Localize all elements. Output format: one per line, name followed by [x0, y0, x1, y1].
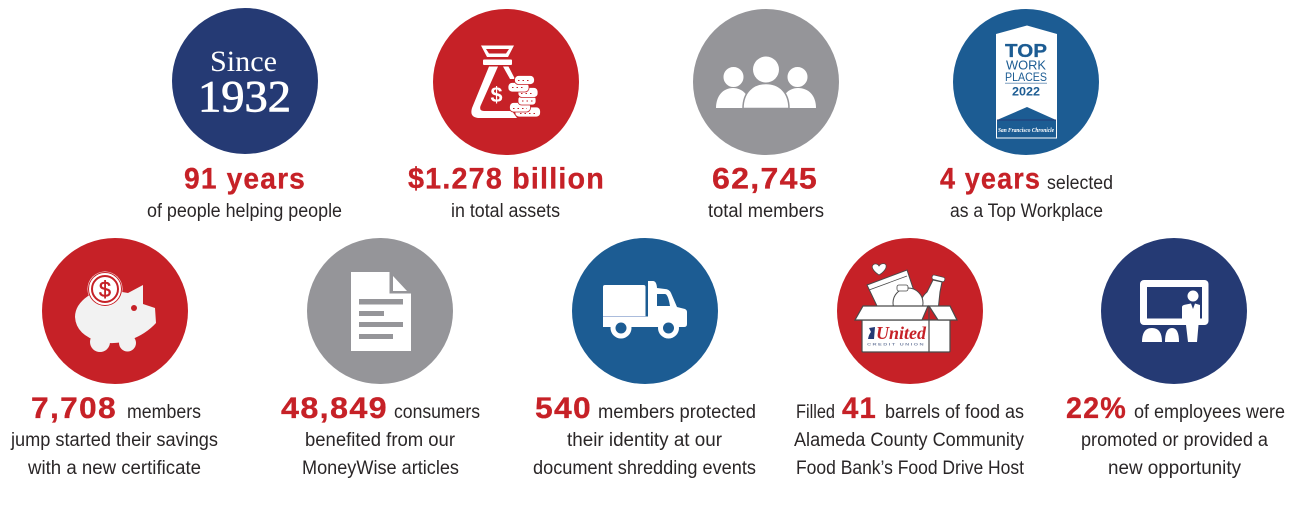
text: 540 members protected: their identity at our: [567, 430, 723, 451]
text: 4 years selected: selected: [1047, 173, 1113, 194]
stat: top workplace: [940, 9, 1113, 222]
circle icon: money bag and coins: [433, 9, 579, 155]
text: 7,708 members: with a new certificate: [27, 458, 201, 479]
circle icon: top workplaces badge: WORK: [1006, 58, 1046, 72]
text: $1.278 billion: in total assets: [451, 201, 560, 222]
text: filled 41 barrels: Alameda County Community: [794, 430, 1024, 451]
text: 540 members protected: document shredding events: [533, 458, 756, 479]
text: 48,849 consumers: 48,849: [281, 392, 388, 425]
circle icon: top workplaces badge: [953, 9, 1099, 155]
text: $1.278 billion: [408, 162, 605, 222]
text: filled 41 barrels: 41: [842, 392, 877, 425]
text: 4 years selected: [940, 162, 1113, 222]
text: 48,849 consumers: MoneyWise articles: [302, 458, 459, 479]
text: 4 years selected: as a Top Workplace: [950, 201, 1103, 222]
circle icon: presenter at board: [1101, 238, 1247, 384]
circle icon: since 1932: 1932: [198, 72, 291, 121]
text: 91 years: [147, 162, 342, 222]
stat: document shredding: [533, 238, 756, 479]
text: 540 members protected: 540: [535, 392, 592, 425]
text: $1.278 billion: $1.278 billion: [408, 162, 605, 196]
text: 22% of employees: promoted or provided a: [1081, 430, 1268, 451]
stat: total members: [693, 9, 839, 222]
text: 7,708 members: 7,708: [31, 392, 117, 425]
stat: food drive: [794, 238, 1025, 479]
circle icon: top workplaces badge: PLACES: [1005, 70, 1047, 84]
text: 22% of employees: 22%: [1066, 392, 1127, 425]
circle icon: three people: [693, 9, 839, 155]
text: 7,708 members: [10, 392, 218, 479]
text: 62,745: total members: [708, 201, 824, 222]
circle icon: piggy bank: $: [99, 277, 111, 302]
text: 22% of employees: of employees were: [1134, 402, 1285, 423]
circle icon: food donation box: CREDIT UNION: [867, 342, 925, 346]
text: 7,708 members: members: [127, 402, 201, 423]
text: 91 years: of people helping people: [147, 201, 342, 222]
circle icon: truck: [572, 238, 718, 384]
text: 48,849 consumers: [281, 392, 480, 479]
stat: 91 years: [147, 8, 342, 222]
stat: employees promoted: [1066, 238, 1285, 479]
text: 62,745: [708, 162, 824, 222]
stat: total assets: [408, 9, 605, 222]
text: 91 years: 91 years: [184, 162, 306, 196]
text: 48,849 consumers: consumers: [394, 402, 480, 423]
circle icon: top workplaces badge: San Francisco Chronicle: [998, 127, 1054, 134]
text: 540 members protected: [533, 392, 756, 479]
text: 62,745: 62,745: [712, 162, 818, 196]
circle icon: money bag and coins: $: [490, 84, 503, 107]
text: 22% of employees: new opportunity: [1108, 458, 1241, 479]
text: 22% of employees: [1066, 392, 1285, 479]
text: filled 41 barrels: Food Bank’s Food Drive Host: [796, 458, 1025, 479]
circle icon: top workplaces badge: 2022: [1012, 86, 1040, 98]
circle icon: top workplaces badge: TOP: [1005, 40, 1047, 61]
circle icon: food donation box: [837, 238, 983, 384]
stat: savings certificate: [10, 238, 218, 479]
text: 48,849 consumers: benefited from our: [305, 430, 456, 451]
text: 4 years selected: 4 years: [940, 162, 1041, 196]
circle icon: piggy bank: [42, 238, 188, 384]
text: filled 41 barrels: [794, 392, 1025, 479]
circle icon: document: [307, 238, 453, 384]
circle icon: food donation box: United: [876, 323, 927, 343]
text: 7,708 members: jump started their savings: [10, 430, 218, 451]
circle icon: since 1932: [172, 8, 318, 154]
text: filled 41 barrels: Filled: [796, 402, 835, 423]
text: filled 41 barrels: barrels of food as: [885, 402, 1024, 423]
stat: moneywise articles: [281, 238, 480, 479]
text: 540 members protected: members protected: [598, 402, 756, 423]
circle icon: since 1932: Since: [210, 45, 277, 78]
